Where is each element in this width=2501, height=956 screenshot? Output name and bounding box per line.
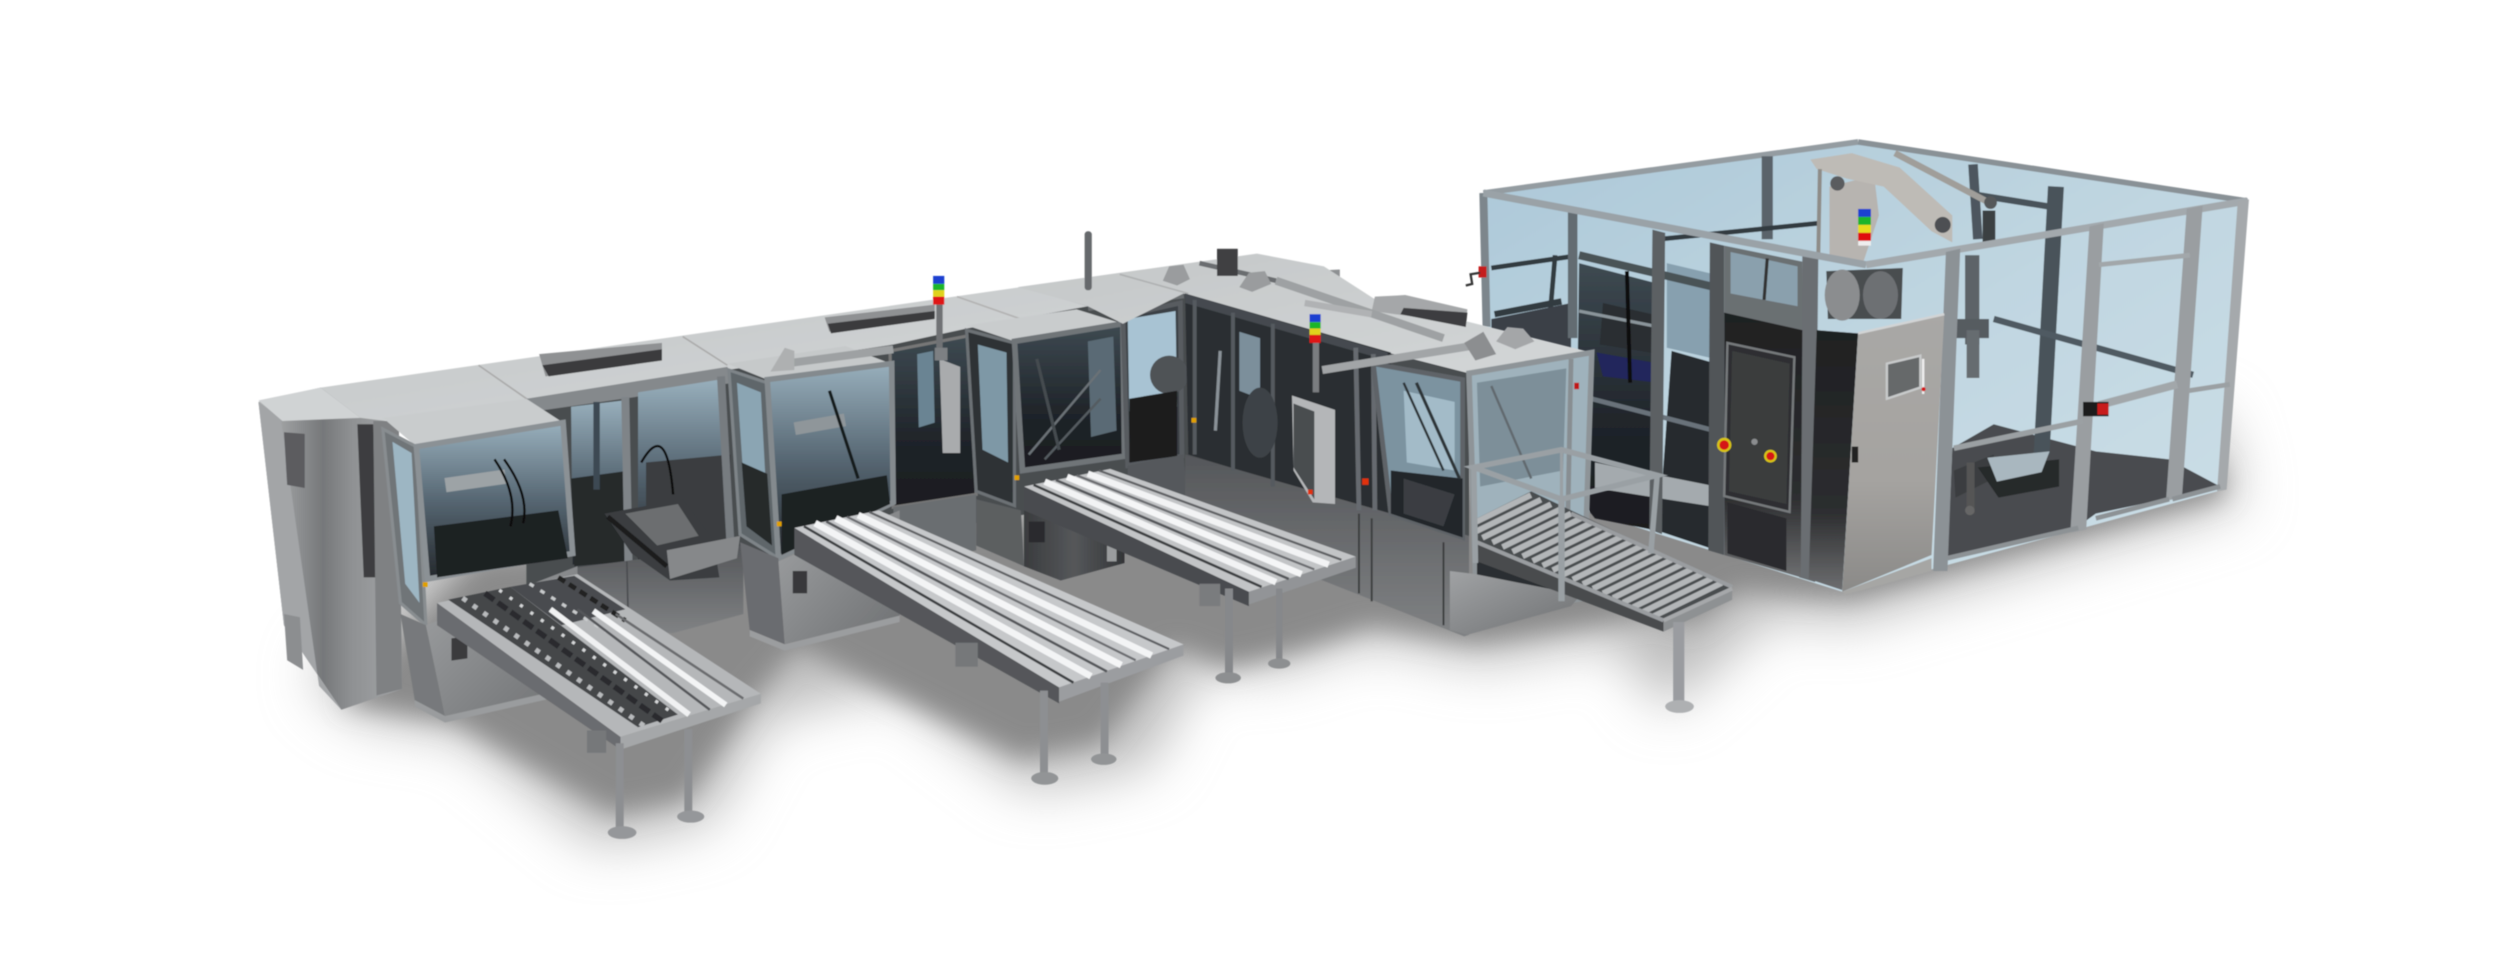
- exit guard frame: [1474, 450, 1657, 601]
- roof: [967, 309, 1123, 341]
- illustration: automated packaging line: [258, 138, 2262, 870]
- back end block behind L roof: [1308, 270, 1340, 289]
- front glass: [416, 423, 573, 579]
- base of window wall 1: [574, 545, 743, 633]
- conveyor 1 with trays: [437, 574, 761, 839]
- cell glass enclosure: [1483, 142, 2247, 592]
- rooftop bars and gussets: [1163, 249, 1534, 349]
- main production line: [258, 231, 1732, 839]
- side panel: [967, 330, 1014, 506]
- robot tower light: [1858, 209, 1871, 246]
- station 2: [727, 335, 976, 651]
- front glass: [1014, 324, 1125, 471]
- antenna pole: [1085, 231, 1092, 290]
- cell front frame: [1483, 193, 2249, 582]
- back frame of the cell: [1483, 142, 2247, 478]
- robot cell: [1466, 142, 2249, 595]
- tower light and HMI, station 2: [933, 276, 960, 453]
- rooftop unit 1: [539, 343, 662, 376]
- back window 2: [890, 335, 976, 507]
- tower light, arm and HMI, station 4: [1292, 314, 1496, 504]
- robot gripper: [1954, 211, 1995, 378]
- roof: [727, 346, 895, 380]
- base: [976, 499, 1024, 566]
- floor shadow: [311, 399, 2241, 845]
- robot arm: [1810, 153, 1997, 321]
- left stainless cabinet: [258, 388, 402, 710]
- panel: back window wall 1: [526, 367, 743, 633]
- arm on roof: [785, 349, 893, 364]
- L-shaped roof: [1018, 254, 1592, 373]
- long wall under L roof: [1185, 293, 1469, 636]
- rooftop unit 3: [1372, 295, 1467, 327]
- dark operator panel column: [1717, 246, 1802, 577]
- tray module: [605, 499, 740, 581]
- station 4 front: [1450, 352, 1592, 635]
- silver conveyor 2: [794, 510, 1184, 785]
- side panel: [729, 370, 778, 558]
- front glass: [767, 364, 893, 558]
- cell floor: [1947, 424, 2220, 558]
- station 1: [383, 399, 577, 723]
- black cabinet face: [1809, 330, 1858, 590]
- crank handle: [1466, 266, 1487, 285]
- silver conveyor 3: [1024, 469, 1356, 683]
- window 3: [1088, 293, 1188, 534]
- rooftop unit 2: [825, 305, 935, 333]
- interior machinery of the cell: [1576, 252, 2059, 550]
- base: [400, 614, 445, 716]
- dark backing behind the glazing: [526, 293, 1469, 590]
- stainless control cabinet: [1842, 314, 1944, 595]
- station 3: [967, 309, 1125, 581]
- side panel: [383, 429, 426, 625]
- station 4 side window: [1373, 364, 1463, 537]
- roof: [383, 399, 563, 447]
- base: [740, 542, 785, 644]
- back roof: [321, 287, 1088, 421]
- roller conveyor: [1477, 491, 1732, 714]
- door safety lock: [2083, 402, 2109, 416]
